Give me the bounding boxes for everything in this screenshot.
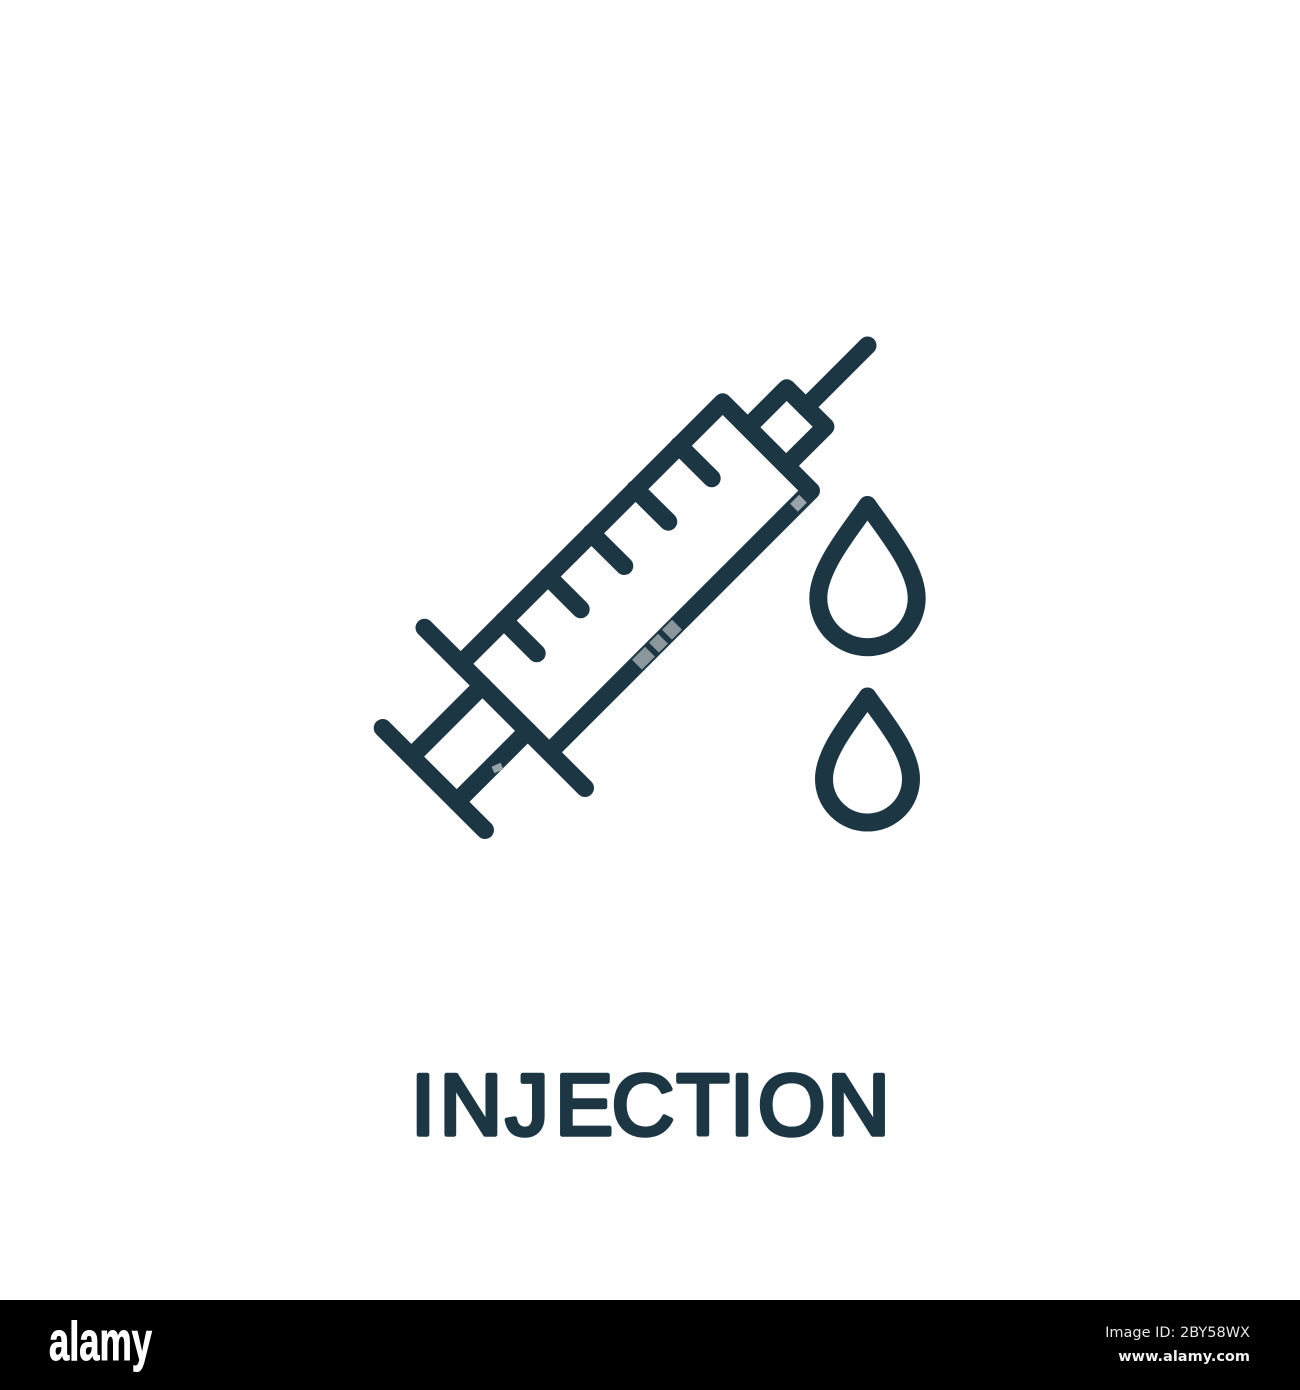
website: www.alamy.com xyxy=(1118,1349,1250,1365)
icon: small drop xyxy=(824,696,911,823)
image id: Image ID: 2BY58WX xyxy=(1105,1325,1250,1341)
barrel xyxy=(461,402,811,752)
icon: syringe xyxy=(383,346,868,830)
needle xyxy=(806,346,868,407)
plunger head xyxy=(383,728,485,830)
barrel flange xyxy=(424,628,585,788)
icon: large drop xyxy=(818,505,917,647)
plunger rods xyxy=(412,686,528,802)
logo: alamy xyxy=(49,1310,152,1372)
watermark fragments on syringe xyxy=(493,499,803,770)
footer bar xyxy=(0,1300,1300,1390)
needle hub xyxy=(748,388,825,466)
barrel graduation ticks xyxy=(504,446,712,653)
title: INJECTION xyxy=(411,1058,890,1154)
